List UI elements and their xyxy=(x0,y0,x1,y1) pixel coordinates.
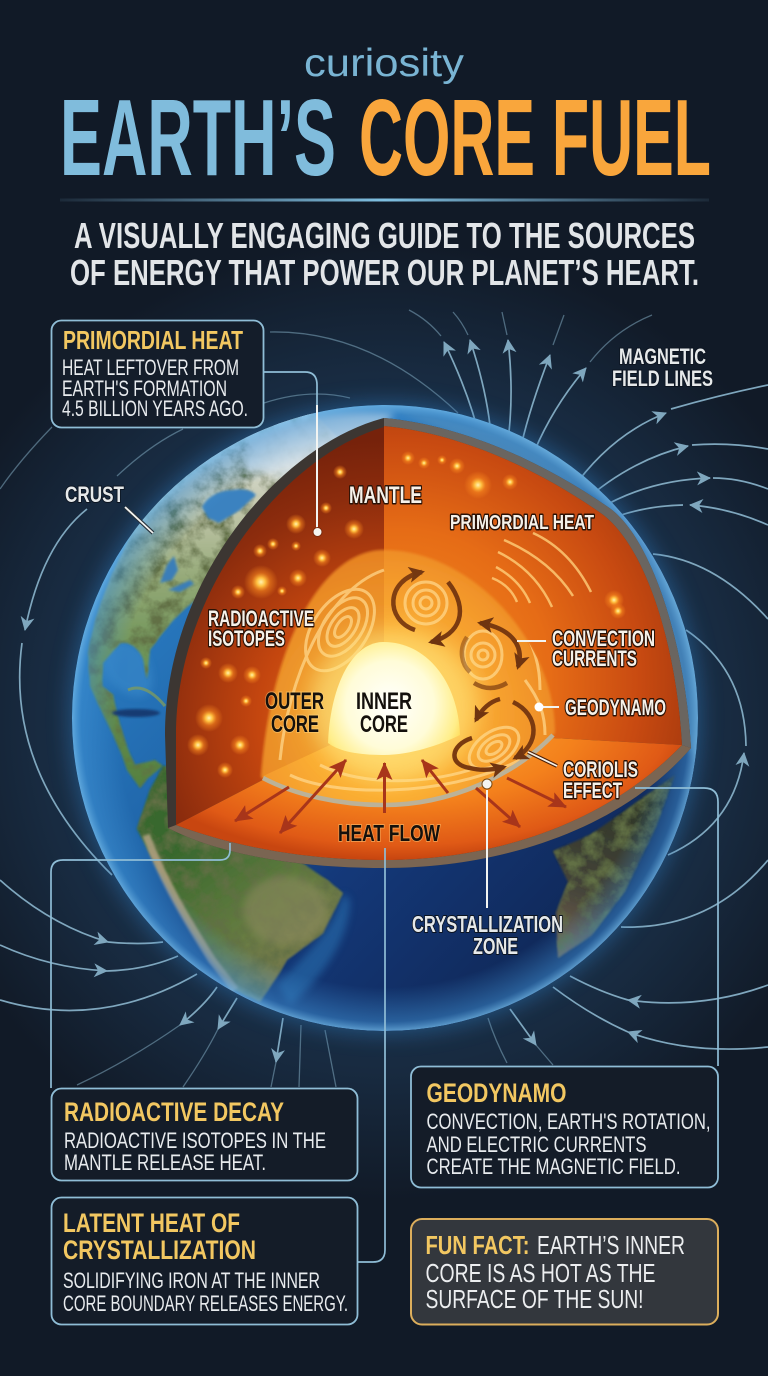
radioactive isotope spots xyxy=(187,451,626,778)
great lakes xyxy=(160,556,194,592)
label: crystallization zone: CRYSTALLIZATION xyxy=(412,911,563,937)
label: convection currents xyxy=(552,626,655,671)
label: magnetic field lines xyxy=(612,344,713,391)
subtitle xyxy=(70,215,699,293)
fun fact text: CORE IS AS HOT AS THE xyxy=(426,1258,656,1288)
body: primordial heat: EARTH'S FORMATION xyxy=(62,376,227,401)
body: latent heat xyxy=(63,1268,348,1316)
mantle left panel xyxy=(176,427,384,825)
label: crystallization zone xyxy=(412,911,563,959)
panel: primordial heat xyxy=(52,320,264,428)
bottom rim band xyxy=(168,745,691,868)
primordial heat arcs xyxy=(492,533,591,607)
atmosphere rim xyxy=(72,405,698,1031)
label: radioactive isotopes: ISOTOPES xyxy=(208,626,285,651)
panel: radioactive decay xyxy=(52,1088,358,1180)
label: heat flow: HEAT FLOW xyxy=(338,820,440,846)
heading: latent heat of crystallization xyxy=(63,1208,256,1265)
body: radioactive decay xyxy=(64,1128,326,1175)
right rim lighter band xyxy=(384,418,691,748)
body: latent heat: SOLIDIFYING IRON AT THE INNER xyxy=(63,1268,320,1293)
arctic ice xyxy=(244,411,395,478)
mantle right panel xyxy=(384,426,682,745)
label: magnetic field lines: FIELD LINES xyxy=(612,366,713,391)
heading: primordial heat: PRIMORDIAL HEAT xyxy=(63,325,243,355)
heading: latent heat of crystallization: CRYSTALLIZATION xyxy=(63,1235,256,1265)
cutaway wedge xyxy=(165,418,691,868)
continents xyxy=(72,400,700,1031)
inner core glow xyxy=(310,630,478,780)
label: outer core: OUTER xyxy=(265,688,324,715)
title rule xyxy=(60,198,709,202)
panel: geodynamo xyxy=(411,1066,718,1188)
africa xyxy=(553,775,675,958)
crust pointer xyxy=(125,507,153,533)
label: mantle: MANTLE xyxy=(349,482,422,509)
heat flow arrows xyxy=(235,760,566,833)
label: coriolis effect: CORIOLIS xyxy=(563,757,638,782)
fun fact text: FUN FACT: xyxy=(426,1230,530,1260)
inner core xyxy=(328,642,460,755)
pointer: convection currents xyxy=(517,640,546,642)
label: convection currents: CONVECTION xyxy=(552,626,655,651)
title block xyxy=(60,42,711,293)
label: primordial heat: PRIMORDIAL HEAT xyxy=(450,512,594,534)
label: convection currents: CURRENTS xyxy=(552,646,637,671)
convection current arrows xyxy=(393,572,534,770)
caribbean shadow xyxy=(112,709,160,717)
floor panel xyxy=(176,720,682,860)
callout connector: latent heat xyxy=(358,848,385,1262)
body: primordial heat: 4.5 BILLION YEARS AGO. xyxy=(62,396,248,421)
title: Earth's: EARTH’S xyxy=(60,77,336,199)
body: geodynamo: CREATE THE MAGNETIC FIELD. xyxy=(426,1154,680,1179)
faint magnetic field line ends xyxy=(0,310,725,1087)
fun fact text xyxy=(426,1230,685,1314)
crust rim xyxy=(165,418,691,868)
brazil highlands xyxy=(243,876,327,944)
outer core swirls xyxy=(280,570,545,790)
globe xyxy=(69,400,701,1034)
globe ocean xyxy=(72,405,698,1031)
outer core xyxy=(261,550,555,805)
outer core left shade xyxy=(261,550,384,777)
hudson bay xyxy=(202,489,256,523)
globe glow xyxy=(69,402,701,1034)
panel: latent heat of crystallization xyxy=(52,1198,358,1324)
label: coriolis effect: EFFECT xyxy=(563,778,622,803)
body: radioactive decay: MANTLE RELEASE HEAT. xyxy=(64,1150,266,1175)
panel: fun fact xyxy=(411,1219,718,1324)
label: coriolis effect xyxy=(563,757,638,803)
label: crystallization zone: ZONE xyxy=(473,933,518,959)
label: radioactive isotopes: RADIOACTIVE xyxy=(208,606,314,631)
north america xyxy=(88,400,340,788)
callout connector: primordial heat xyxy=(264,372,322,536)
body: primordial heat xyxy=(62,355,248,421)
label: outer core xyxy=(265,688,324,738)
label: crust: CRUST xyxy=(65,482,124,507)
heading: geodynamo: GEODYNAMO xyxy=(426,1078,566,1108)
callout connector: crystallization zone xyxy=(482,779,492,908)
label: outer core: CORE xyxy=(271,711,319,738)
fun fact text: EARTH’S INNER xyxy=(537,1230,685,1260)
callout connector: geodynamo xyxy=(635,788,718,1066)
fun fact text: SURFACE OF THE SUN! xyxy=(426,1284,644,1314)
brand name: curiosity: curiosity xyxy=(304,42,465,85)
pointer: geodynamo xyxy=(534,702,559,712)
pointer: coriolis effect xyxy=(528,752,557,766)
heading: radioactive decay: RADIOACTIVE DECAY xyxy=(64,1097,284,1127)
andes ridge xyxy=(146,835,235,990)
body: radioactive decay: RADIOACTIVE ISOTOPES IN THE xyxy=(64,1128,326,1153)
top right ocean strip xyxy=(407,412,698,756)
body: primordial heat: HEAT LEFTOVER FROM xyxy=(62,355,239,380)
body: geodynamo xyxy=(426,1109,710,1179)
label: radioactive isotopes xyxy=(208,606,314,651)
label: geodynamo: GEODYNAMO xyxy=(565,695,666,720)
crystallization zone band xyxy=(263,735,553,805)
label: inner core: CORE xyxy=(360,711,408,738)
heading: latent heat of crystallization: LATENT HEAT OF xyxy=(63,1208,240,1238)
gulf of mexico light water xyxy=(108,644,151,695)
diagram labels xyxy=(65,344,713,959)
south america xyxy=(137,766,343,1002)
cuba xyxy=(128,688,165,706)
label: inner core xyxy=(356,688,412,738)
body: latent heat: CORE BOUNDARY RELEASES ENERGY. xyxy=(63,1291,348,1316)
coastal light water south atlantic xyxy=(277,893,350,1005)
magnetic field lines xyxy=(0,340,768,1062)
body: geodynamo: AND ELECTRIC CURRENTS xyxy=(426,1132,646,1157)
callout connector: radioactive decay xyxy=(51,843,230,1088)
label: inner core: INNER xyxy=(356,688,412,715)
label: magnetic field lines: MAGNETIC xyxy=(619,344,706,369)
